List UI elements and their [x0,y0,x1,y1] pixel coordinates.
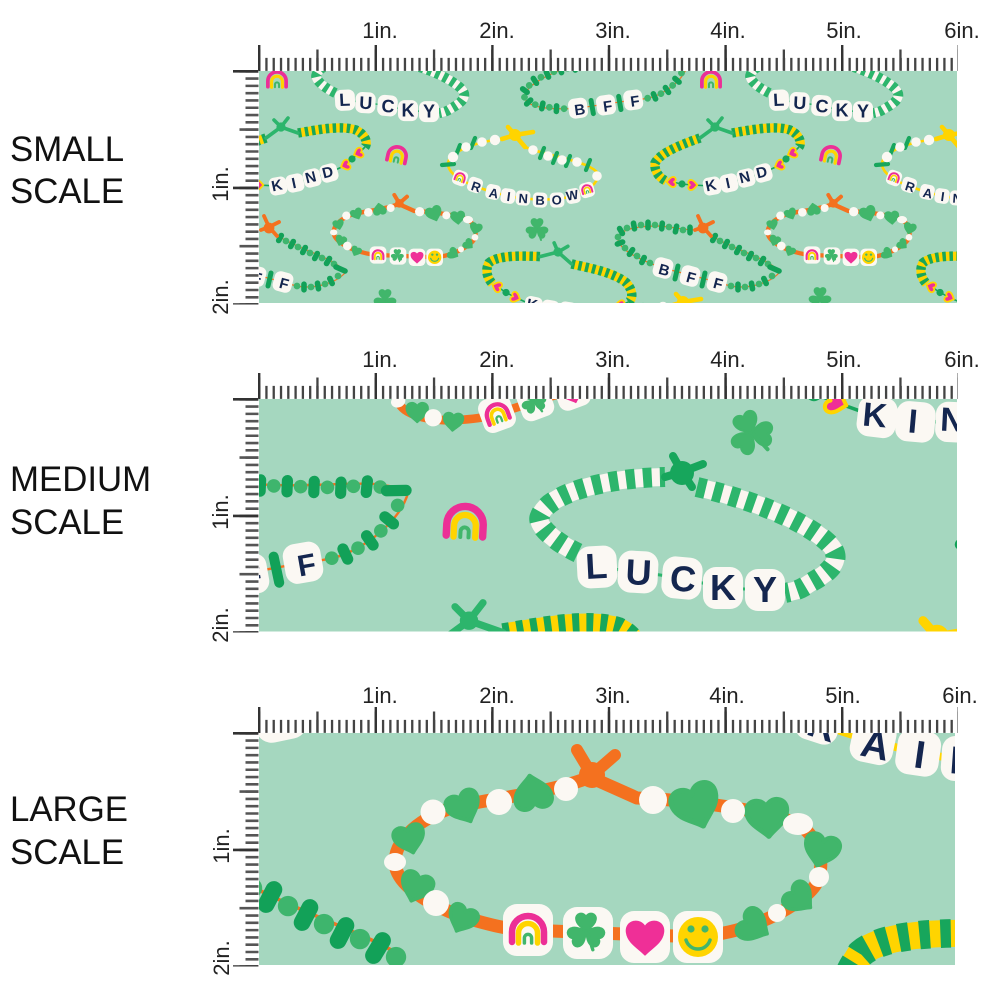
ruler: medium scale [208,347,980,643]
ruler: small scale [208,18,980,315]
bracelet: KIND lower: KIND [522,281,595,336]
ruler: small scale: 6in. [944,18,980,43]
bracelet: KIND lower right [910,221,1000,348]
bracelet: BFF left [67,391,426,669]
ruler: large scale: 2in. [479,683,515,708]
ruler: large scale: 3in. [595,683,631,708]
ruler: medium scale: 2in. [208,607,233,643]
bracelet: RAINBOW tip at bottom edge [610,294,770,375]
bracelet: KIND right [655,118,800,196]
bracelet: KIND left [221,118,366,196]
bracelet: LUCKY repeat [750,45,898,122]
bracelet: BFF lower left [183,216,345,294]
bracelet: BFF lower: BFF [657,261,725,294]
bracelet: RAINBOW: RAINBOW [469,178,580,208]
bracelet: KIND lower [476,221,640,348]
bracelet: KIND top right [748,234,1000,497]
bracelet: KIND bottom right [850,855,1000,1000]
ruler: large scale: 1in. [362,683,398,708]
bracelet: BFF left: BFF [176,518,326,634]
ruler: small scale: 3in. [595,18,631,43]
bracelet: BFF bottom left [222,870,396,957]
bracelet: LUCKY [539,456,836,611]
bracelet: RAINBOW right [876,127,1000,208]
bracelet: RAINBOW tip [791,621,1000,782]
panel: medium scale fabric swatch [176,363,1000,634]
bracelet: LUCKY [316,45,464,122]
bracelet: BFF upper: BFF [569,78,645,134]
bracelet: orange charm right [764,195,917,266]
icon: rainbow [446,506,484,538]
ruler: large scale: 5in. [825,683,861,708]
icon: shamrocks [373,219,832,311]
panel: large scale fabric swatch [259,702,1000,965]
heading: SMALL SCALE: SMALL [10,130,124,169]
heading: LARGE SCALE: LARGE [10,790,128,829]
bracelet: RAINBOW top right [720,546,1000,789]
bracelet: KIND right: KIND [704,163,769,195]
ruler: large scale: 2in. [209,940,234,976]
ruler: medium scale: 6in. [944,347,980,372]
ruler: medium scale: 1in. [208,494,233,530]
ruler: small scale: 5in. [826,18,862,43]
bracelet: LUCKY: LUCKY [584,545,777,610]
bracelet: KIND lower edge [349,603,640,759]
ruler: small scale: 2in. [208,279,233,315]
panel: small scale fabric swatch [223,71,1000,336]
icon: shamrock [721,404,782,463]
bracelet: BFF lower left: BFF [223,261,291,294]
ruler: small scale: 2in. [479,18,515,43]
bracelet: KIND bead top left [57,519,493,754]
ruler: large scale: 1in. [209,828,234,864]
ruler: medium scale: 3in. [595,347,631,372]
bracelet: LUCKY: LUCKY [339,90,435,122]
bracelet: orange charm [384,750,842,963]
bracelet: BFF upper right edge [954,15,1000,150]
ruler: medium scale: 1in. [362,347,398,372]
ruler: large scale: 4in. [709,683,745,708]
ruler: small scale: 1in. [208,166,233,202]
bracelet: BFF upper [516,15,695,150]
icon: rainbows [268,72,842,164]
ruler: medium scale: 5in. [826,347,862,372]
ruler: small scale: 4in. [710,18,746,43]
bracelet: BFF lower [617,216,779,294]
heading: MEDIUM SCALE: MEDIUM [10,460,151,499]
ruler: small scale: 1in. [362,18,398,43]
bracelet: RAINBOW [442,127,602,208]
ruler: medium scale: 4in. [710,347,746,372]
heading: SMALL SCALE: SCALE [10,172,124,211]
bracelet: LUCKY repeat: LUCKY [773,90,869,122]
bracelet: orange charm top edge [366,229,701,467]
bracelet: BFF right edge [946,397,1000,667]
ruler: large scale [209,683,978,976]
heading: LARGE SCALE: SCALE [10,833,124,872]
ruler: large scale: 6in. [942,683,978,708]
bracelet: KIND left: KIND [270,163,335,195]
ruler: medium scale: 2in. [479,347,515,372]
heading: MEDIUM SCALE: SCALE [10,503,124,542]
bracelet: orange charm [330,195,483,266]
